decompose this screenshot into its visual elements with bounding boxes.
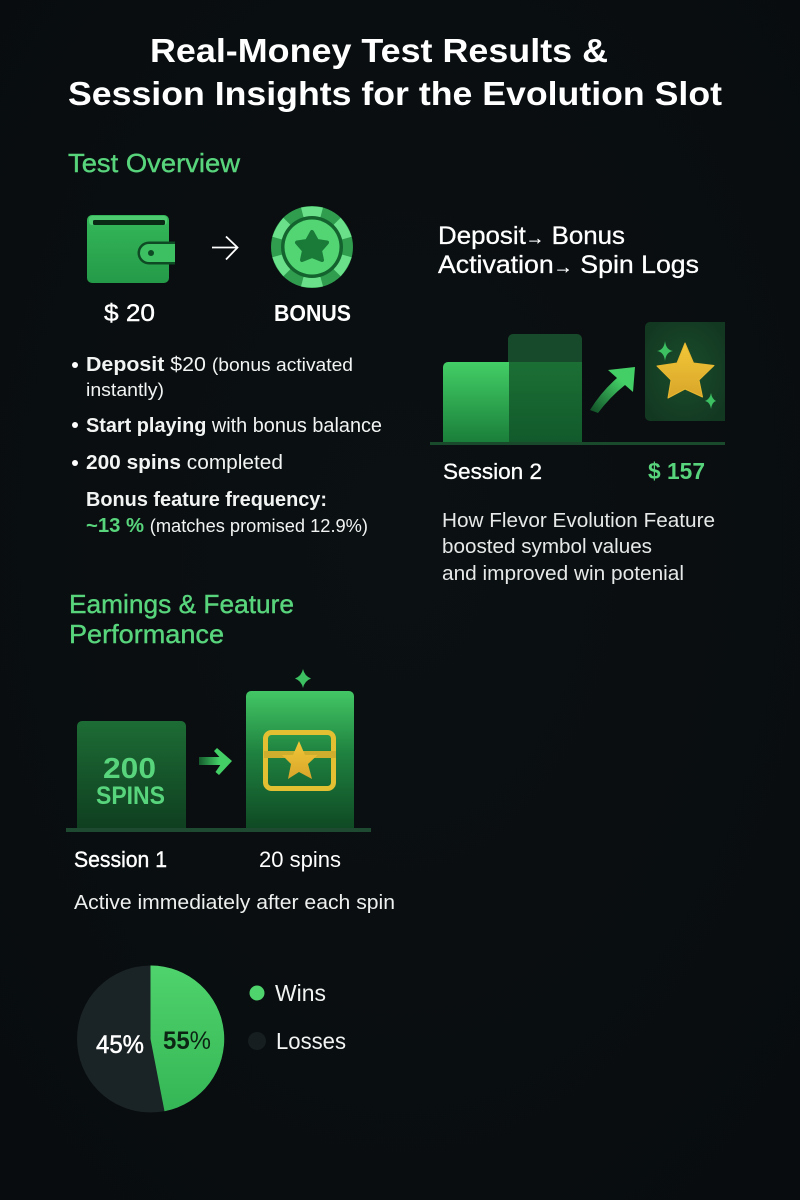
axis line xyxy=(66,828,371,832)
text: active immediately: Active immediately after each spin xyxy=(74,892,395,914)
heading: test overview: Test Overview xyxy=(68,148,240,178)
heading: deposit to spin logs: Activation → Spin Logs xyxy=(438,251,699,279)
pie chart: wins vs losses: 55% xyxy=(163,1027,211,1055)
legend: wins xyxy=(250,980,326,1006)
title xyxy=(68,32,722,112)
icon: wallet xyxy=(87,215,175,283)
legend: losses: Losses xyxy=(276,1028,346,1054)
icon: bonus chip xyxy=(271,206,353,288)
legend: losses xyxy=(248,1028,346,1054)
bar: feature treasure xyxy=(246,691,354,828)
axis line xyxy=(430,442,725,445)
title: Session Insights for the Evolution Slot xyxy=(68,75,722,112)
label: 20 spins: 20 spins xyxy=(259,847,341,872)
label: $ 20: $ 20 xyxy=(104,300,155,327)
heading: deposit to spin logs: Deposit→ Bonus xyxy=(438,222,625,250)
bar: bonus xyxy=(508,334,582,442)
card: star xyxy=(645,322,725,421)
heading: deposit to spin logs xyxy=(438,222,699,279)
sparkle xyxy=(295,669,311,688)
bullet list: test overview: 200 spins completed xyxy=(86,452,283,474)
bar: 200 spins: 200 xyxy=(103,753,156,785)
bullet list: test overview: Deposit $20 (bonus activated xyxy=(86,354,353,376)
heading: earnings and feature performance xyxy=(69,589,294,649)
label: session 1: Session 1 xyxy=(74,847,167,872)
bullet list: test overview xyxy=(72,354,382,537)
bullet list: test overview: Bonus feature frequency: xyxy=(86,489,327,511)
label: bonus: BONUS xyxy=(274,300,351,326)
icon: arrow to bonus xyxy=(212,236,238,260)
text: flevor evolution feature xyxy=(442,510,715,585)
bar: 200 spins: SPINS xyxy=(96,782,165,810)
bar: 200 spins xyxy=(77,721,186,828)
chart: session 1 bars xyxy=(66,669,371,832)
bullet list: test overview: Start playing with bonus balance xyxy=(86,415,382,437)
pie chart: wins vs losses: 45% xyxy=(96,1031,144,1059)
pie chart: wins vs losses xyxy=(77,965,224,1112)
chart: session 2 xyxy=(430,322,725,445)
arrow: session 1 xyxy=(199,748,232,775)
title: Real-Money Test Results & xyxy=(150,32,608,69)
arrow: upward xyxy=(590,367,635,413)
text: flevor evolution feature: and improved win potenial xyxy=(442,563,684,585)
text: flevor evolution feature: boosted symbol values xyxy=(442,536,652,558)
bullet list: test overview: instantly) xyxy=(86,380,164,400)
label: session 2: Session 2 xyxy=(443,459,542,484)
heading: earnings and feature performance: Eamings & Feature xyxy=(69,589,294,619)
bar: deposit xyxy=(443,362,509,442)
text: flevor evolution feature: How Flevor Evolution Feature xyxy=(442,510,715,532)
heading: earnings and feature performance: Performance xyxy=(69,619,224,649)
value: $157: $ 157 xyxy=(648,458,705,484)
bullet list: test overview: ~13 % (matches promised 12.9%) xyxy=(86,515,368,537)
legend: wins: Wins xyxy=(275,980,326,1006)
